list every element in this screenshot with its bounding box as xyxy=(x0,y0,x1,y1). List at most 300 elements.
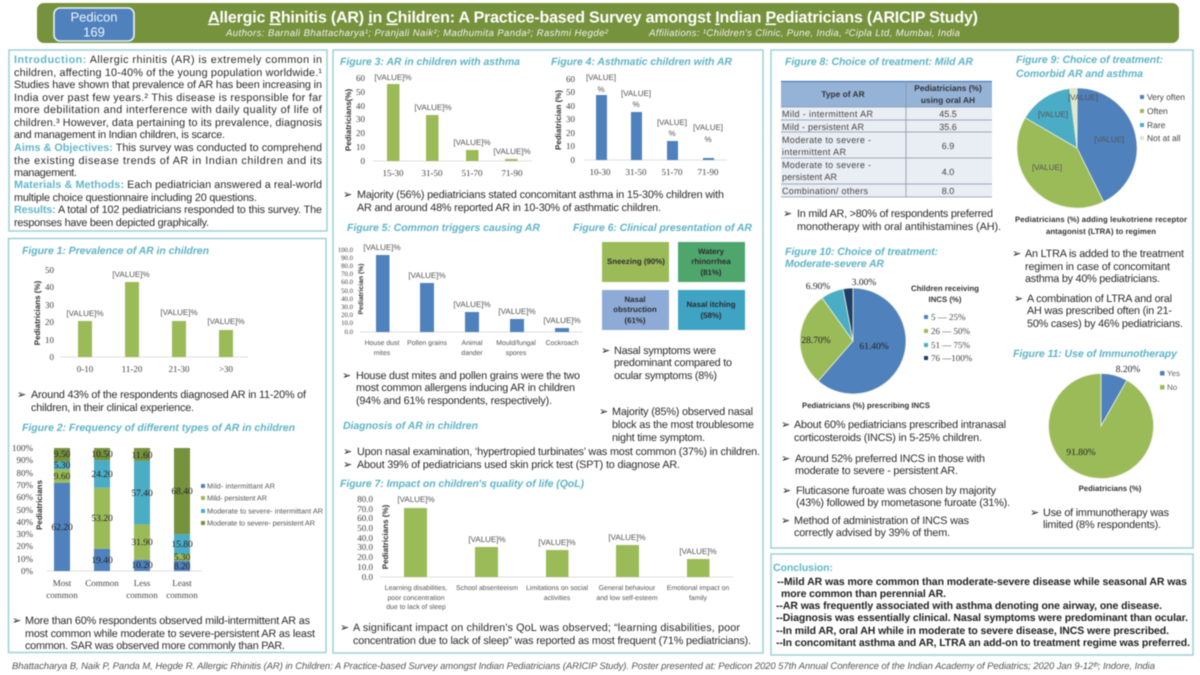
bar chart: figure 4: 31-50 xyxy=(626,167,647,177)
heading: figure 3: Figure 3: AR in children with asthma xyxy=(340,56,520,68)
takeaway: figure 9 combination: A combination of LTRA and oral xyxy=(1027,293,1172,305)
badge: Pedicon 169: Pedicon xyxy=(71,10,117,24)
stacked bar chart: figure 2: 11.60 xyxy=(131,451,153,461)
tiles: figure 6 clinical presentation: (81%) xyxy=(700,268,722,277)
bar chart: figure 7: 40.0 xyxy=(357,533,374,543)
authors: Authors: Barnali Bhattacharya¹; Pranjali Naik²; Madhumita Panda²; Rashmi Hegde² xyxy=(225,28,609,39)
stacked bar chart: figure 2: 57.40 xyxy=(131,489,153,499)
bar chart: figure 1: 0 xyxy=(50,352,54,362)
takeaway: figure 6 xyxy=(601,344,732,382)
bar chart: figure 3: 50 xyxy=(356,87,366,97)
bar chart: figure 7: 60.0 xyxy=(357,513,374,523)
bar chart: figure 7: 80.0 xyxy=(357,494,374,504)
bar chart: figure 3: [VALUE]% xyxy=(493,147,531,156)
legend: figure 9: Rare xyxy=(1147,120,1166,130)
footer citation: Bhattacharya B, Naik P, Panda M, Hegde R. Allergic Rhinitis (AR) in Children: A Practice-based Survey amongst Indian Pediatricians (ARICIP Study). Poster presented at: Pedicon 2020 57th Annual Conference of the Indian Academy of Pediatrics; 2020 Jan 9-12ᵗʰ; Indore, India xyxy=(12,661,1155,672)
takeaway: figure 5: ➢ xyxy=(342,369,351,382)
table: figure 8: Type of AR xyxy=(821,89,865,99)
table: figure 8: Combination/ others xyxy=(782,186,868,196)
bar chart: figure 5 xyxy=(338,243,583,357)
bar chart: figure 1: [VALUE]% xyxy=(112,270,150,279)
takeaways: figure 10: Around 52% preferred INCS in those with xyxy=(795,453,985,465)
caption: figure 10: Pediatricians (%) prescribing INCS xyxy=(802,401,930,410)
takeaway: figures 3 and 4: Majority (56%) pediatricians stated concomitant asthma in 15-30% children with xyxy=(357,189,724,201)
legend: figure 10: Children receiving xyxy=(911,284,979,293)
bar chart: figure 5: 80.0 xyxy=(341,263,354,270)
panel: conclusion xyxy=(771,554,1193,655)
introduction text: Aims & Objectives: This survey was conducted to comprehend xyxy=(14,142,322,154)
bar chart: figure 5: Pollen grains xyxy=(407,340,447,347)
tiles: figure 6 clinical presentation: (58%) xyxy=(700,311,722,320)
bar chart: figure 4: 40 xyxy=(566,101,576,111)
bar chart: figure 5: [VALUE]% xyxy=(453,300,491,309)
takeaway: figure 7: concentration due to lack of sleep” was reported as most frequent (71% pediatricians). xyxy=(353,635,751,647)
legend: figure 2: Moderate to severe- persistent AR xyxy=(207,518,315,528)
bar chart: figure 7: activities xyxy=(544,595,571,602)
pie chart: figure 9: [VALUE] xyxy=(1032,163,1062,172)
bar chart: figure 3: 10 xyxy=(356,142,366,152)
bar chart: figure 7: Emotional impact on xyxy=(667,585,729,592)
takeaway: figure 7: ➢ xyxy=(340,621,349,634)
bar chart: figure 4: 60 xyxy=(566,74,576,84)
bar chart: figure 4: [VALUE] xyxy=(693,123,723,132)
legend: figure 11 xyxy=(1160,369,1180,392)
introduction text: Materials & Methods: Each pediatrician answered a real-world xyxy=(14,179,322,191)
bar chart: figure 1: 40 xyxy=(45,282,54,292)
bar chart: figure 1: Pediatricians (%) xyxy=(33,280,42,345)
takeaway: night time symptom: Majority (85%) observed nasal xyxy=(612,406,753,418)
bar chart: figure 5: 10.0 xyxy=(341,320,354,327)
heading: figure 10: Moderate-severe AR xyxy=(785,258,884,270)
stacked bar chart: figure 2: 62.20 xyxy=(51,523,73,533)
takeaways: figure 10: correctly advised by 39% of them. xyxy=(794,527,950,539)
legend: figure 10: 51 — 75% xyxy=(931,340,970,350)
tiles: figure 6 clinical presentation xyxy=(602,242,745,330)
bar chart: figure 5: dander xyxy=(461,350,483,357)
takeaways: figure 10: ➢ xyxy=(781,418,790,431)
bar chart: figure 5: 60.0 xyxy=(341,279,354,286)
bar chart: figure 1: [VALUE]% xyxy=(207,317,245,326)
takeaway: figure 9 combination xyxy=(1014,292,1183,330)
bar chart: figure 3: 0 xyxy=(360,156,366,166)
takeaway: figure 2: common. SAR was observed more commonly than PAR. xyxy=(25,640,285,652)
bar chart: figure 7: [VALUE]% xyxy=(538,538,576,547)
takeaways: figure 10: ➢ xyxy=(782,484,791,497)
stacked bar chart: figure 2: 53.20 xyxy=(91,514,113,524)
stacked bar chart: figure 2: 50% xyxy=(16,505,34,515)
bar chart: figure 3: [VALUE]% xyxy=(414,103,452,112)
takeaway: figure 6: Nasal symptoms were xyxy=(614,345,716,357)
takeaway: figure 5: (94% and 61% respondents, respectively). xyxy=(356,395,552,407)
bar chart: figure 3: 51-70 xyxy=(462,168,483,178)
introduction text: management. xyxy=(14,167,77,179)
stacked bar chart: figure 2: Most xyxy=(53,578,72,588)
heading: figure 10 xyxy=(785,246,938,270)
legend: figure 9: Often xyxy=(1147,106,1168,116)
stacked bar chart: figure 2: 10.20 xyxy=(131,561,153,571)
takeaway: figure 11: limited (8% respondents). xyxy=(1043,519,1161,531)
stacked bar chart: figure 2: 70% xyxy=(16,480,34,490)
bar chart: figure 7: 70.0 xyxy=(357,504,374,514)
legend: figure 10: INCS (%) xyxy=(929,295,962,304)
takeaway: figure 8: In mild AR, >80% of respondents preferred xyxy=(797,208,993,220)
stacked bar chart: figure 2: 40% xyxy=(16,517,34,527)
bar chart: figure 5: spores xyxy=(506,350,527,357)
panel: figures 1 and 2 xyxy=(8,238,326,652)
caption: figure 9: antagonist (LTRA) to regimen xyxy=(1046,227,1156,236)
bar chart: figure 7: [VALUE]% xyxy=(608,533,646,542)
stacked bar chart: figure 2: 8.20 xyxy=(174,562,191,572)
bar chart: figure 3: 71-90 xyxy=(502,168,523,178)
heading: figure 6: Figure 6: Clinical presentation of AR xyxy=(573,222,752,234)
pie chart: figure 9: [VALUE] xyxy=(1038,110,1068,119)
bar chart: figure 3: 31-50 xyxy=(422,168,443,178)
takeaway: figure 5: most common allergens inducing AR in children xyxy=(356,382,575,394)
introduction text: and management in Indian children, is scarce. xyxy=(14,129,225,141)
takeaway: figure 8 xyxy=(783,207,1001,233)
introduction text: more debilitation and interference with daily quality of life of xyxy=(14,104,323,116)
legend: figure 2: Moderate to severe- intermittant AR xyxy=(207,506,323,516)
table: figure 8: 8.0 xyxy=(942,186,954,196)
pie chart: figure 9: [VALUE] xyxy=(1068,93,1098,102)
stacked bar chart: figure 2: Common xyxy=(85,578,119,588)
introduction text: Introduction: Allergic rhinitis (AR) is extremely common in xyxy=(14,54,322,66)
bar chart: figure 4: Pediatrician (%) xyxy=(554,90,563,150)
stacked bar chart: figure 2: 31.90 xyxy=(131,538,153,548)
conclusion points: --In mild AR, oral AH while in moderate to severe disease, INCS were prescribed. xyxy=(776,625,1169,637)
bar chart: figure 3: [VALUE]% xyxy=(374,73,412,82)
takeaway: figure 5: House dust mites and pollen grains were the two xyxy=(356,370,580,382)
bar chart: figure 5: [VALUE]% xyxy=(543,316,581,325)
introduction text: the existing disease trends of AR in Indian children and its xyxy=(14,155,323,167)
takeaway: figure 1: ➢ xyxy=(17,388,26,401)
bar chart: figure 5: 100.0 xyxy=(338,247,354,254)
stacked bar chart: figure 2: 9.60 xyxy=(54,472,71,482)
heading: figure 2: Figure 2: Frequency of different types of AR in children xyxy=(22,422,295,434)
pie chart: figure 10 xyxy=(800,278,979,410)
takeaway: diagnosis: ➢ xyxy=(343,458,352,471)
bar chart: figure 7: 10.0 xyxy=(357,562,374,572)
table: figure 8: Mild - persistent AR xyxy=(782,122,864,132)
tiles: figure 6 clinical presentation: rhinorrhea xyxy=(691,257,731,266)
bar chart: figure 7: Learning disabilities, xyxy=(385,585,447,592)
takeaway: figure 2 xyxy=(12,614,315,652)
stacked bar chart: figure 2: 68.40 xyxy=(171,487,193,497)
tiles: figure 6 clinical presentation: Nasal itching xyxy=(686,300,736,309)
bar chart: figure 1: 20 xyxy=(45,317,54,327)
table: figure 8: using oral AH xyxy=(921,95,975,105)
table: figure 8: Moderate to severe - xyxy=(782,160,871,170)
stacked bar chart: figure 2: 20% xyxy=(16,541,34,551)
legend: figure 2 xyxy=(201,482,323,528)
introduction text: children, affecting 10-40% of the young population worldwide.¹ xyxy=(14,67,322,79)
table: figure 8: Pediatricians (%) xyxy=(914,83,982,93)
panel: introduction xyxy=(9,50,327,231)
takeaways: figure 10: Fluticasone furoate was chosen by majority xyxy=(796,485,997,497)
bar chart: figure 5: 50.0 xyxy=(341,288,354,295)
legend: figure 9: Not at all xyxy=(1147,133,1181,143)
takeaway: diagnosis: About 39% of pediatricians used skin prick test (SPT) to diagnose AR. xyxy=(357,459,680,471)
pie chart: figure 11 xyxy=(1049,365,1180,493)
bar chart: figure 4: 10-30 xyxy=(590,167,611,177)
legend: figure 2: Mild- intermittant AR xyxy=(207,482,275,490)
stacked bar chart: figure 2: 90% xyxy=(16,455,34,465)
introduction text: Studies have shown that prevalence of AR has been increasing in xyxy=(14,79,322,91)
bar chart: figure 4: % xyxy=(704,135,712,144)
bar chart: figure 4: % xyxy=(597,85,605,94)
takeaway: figure 6: ocular symptoms (8%) xyxy=(614,370,717,382)
badge: Pedicon 169: 169 xyxy=(83,24,105,40)
bar chart: figure 7: [VALUE]% xyxy=(397,495,435,504)
bar chart: figure 7 xyxy=(357,494,733,611)
bar chart: figure 5: Animal xyxy=(461,340,483,347)
takeaway: figure 9 LTRA: regimen in case of concomitant xyxy=(1025,261,1170,273)
bar chart: figure 4: [VALUE] xyxy=(621,89,651,98)
heading: figure 4: Figure 4: Asthmatic children with AR xyxy=(551,56,732,68)
introduction text: children.³ However, data pertaining to its prevalence, diagnosis xyxy=(14,117,323,129)
table: figure 8: Mild - intermittent AR xyxy=(782,109,874,119)
bar chart: figure 5: 70.0 xyxy=(341,271,354,278)
heading: conclusion: Conclusion: xyxy=(773,562,833,574)
stacked bar chart: figure 2: 100% xyxy=(12,443,34,453)
table: figure 8: persistent AR xyxy=(782,172,838,182)
bar chart: figure 5: 30.0 xyxy=(341,304,354,311)
bar chart: figure 4: % xyxy=(668,129,676,138)
stacked bar chart: figure 2 xyxy=(12,443,323,600)
takeaway: figure 9 combination: ➢ xyxy=(1014,292,1023,305)
bar chart: figure 1: 0-10 xyxy=(77,364,94,374)
tiles: figure 6 clinical presentation: obstruction xyxy=(613,305,657,314)
heading: figure 9: Comorbid AR and asthma xyxy=(1016,68,1143,80)
takeaway: night time symptom xyxy=(599,405,754,444)
pie chart: figure 9: [VALUE] xyxy=(1094,135,1124,144)
stacked bar chart: figure 2: common xyxy=(46,590,78,600)
heading: figure 8: Figure 8: Choice of treatment: Mild AR xyxy=(785,56,973,68)
takeaways: figure 10: Method of administration of INCS was xyxy=(794,515,970,527)
pie chart: figure 11: 91.80% xyxy=(1066,448,1096,458)
bar chart: figure 4: 50 xyxy=(566,87,576,97)
bar chart: figure 7: Limitations on social xyxy=(526,585,588,592)
bar chart: figure 1: 50 xyxy=(45,265,54,275)
bar chart: figure 5: House dust xyxy=(365,340,400,347)
header banner xyxy=(37,3,1179,43)
bar chart: figure 1 xyxy=(33,265,248,374)
bar chart: figure 7: [VALUE]% xyxy=(679,547,717,556)
bar chart: figure 3: [VALUE]% xyxy=(453,138,491,147)
takeaway: night time symptom: night time symptom. xyxy=(612,432,705,444)
bar chart: figure 5: [VALUE]% xyxy=(498,307,536,316)
takeaways: figure 10 xyxy=(781,418,1010,539)
bar chart: figure 4: % xyxy=(632,100,640,109)
bar chart: figure 1: 11-20 xyxy=(122,364,143,374)
takeaway: figure 2: More than 60% respondents observed mild-intermittent AR as xyxy=(25,615,311,627)
takeaway: figure 9 combination: 50% cases) by 46% pediatricians. xyxy=(1027,318,1183,330)
table: figure 8: 4.0 xyxy=(942,167,954,177)
bar chart: figure 4 xyxy=(554,73,727,177)
stacked bar chart: figure 2: common xyxy=(166,590,198,600)
conclusion points: --Mild AR was more common than moderate-severe disease while seasonal AR was xyxy=(777,576,1187,588)
stacked bar chart: figure 2: Least xyxy=(172,578,192,588)
legend: figure 10: 26 — 50% xyxy=(931,326,970,336)
takeaway: figure 9 LTRA xyxy=(1012,247,1184,285)
heading: figure 11: Figure 11: Use of Immunotherapy xyxy=(1013,348,1178,360)
stacked bar chart: figure 2: 5.30 xyxy=(54,461,71,471)
bar chart: figure 7: and low self-esteem xyxy=(596,595,658,602)
bar chart: figure 7: 20.0 xyxy=(357,552,374,562)
tiles: figure 6 clinical presentation: Sneezing (90%) xyxy=(607,257,665,266)
stacked bar chart: figure 2: 15.80 xyxy=(171,540,193,550)
legend: figure 9 xyxy=(1140,92,1185,143)
takeaway: figure 1: Around 43% of the respondents diagnosed AR in 11-20% of xyxy=(31,389,307,401)
stacked bar chart: figure 2: 24.20 xyxy=(91,470,113,480)
table: figure 8 xyxy=(781,81,992,197)
bar chart: figure 7: poor concentration xyxy=(387,595,445,602)
bar chart: figure 3: Pediatricians(%) xyxy=(344,89,353,151)
conclusion points: more common than perennial AR. xyxy=(781,588,946,600)
takeaway: figure 11: Use of immunotherapy was xyxy=(1043,507,1170,519)
tiles: figure 6 clinical presentation: Nasal xyxy=(624,295,646,304)
takeaway: figure 8: monotherapy with oral antihistamines (AH). xyxy=(797,221,1001,233)
introduction text: India over past few years.² This disease is responsible for far xyxy=(14,92,322,104)
takeaway: figures 3 and 4: ➢ xyxy=(343,188,352,201)
takeaway: diagnosis: Upon nasal examination, ‘hypertropied turbinates’ was most common (37%) in children. xyxy=(357,446,760,458)
stacked bar chart: figure 2: 10.50 xyxy=(91,450,113,460)
bar chart: figure 5: 0.0 xyxy=(344,329,354,336)
takeaway: figure 8: ➢ xyxy=(783,207,792,220)
bar chart: figure 7: 50.0 xyxy=(357,523,374,533)
caption: figure 9: Pediatricians (%) adding leukotriene receptor xyxy=(1015,215,1187,224)
heading: figure 9: Figure 9: Choice of treatment: xyxy=(1016,54,1163,66)
takeaway: figures 3 and 4: AR and around 48% reported AR in 10-30% of asthmatic children. xyxy=(357,202,661,214)
panel: figures 3 to 7 xyxy=(333,50,763,653)
stacked bar chart: figure 2: common xyxy=(126,590,158,600)
bar chart: figure 4: 30 xyxy=(566,114,576,124)
bar chart: figure 7: Pediatricians (%) xyxy=(381,504,390,569)
bar chart: figure 5: Cockroach xyxy=(546,340,579,347)
takeaway: figure 9 LTRA: asthma by 40% pediatricians. xyxy=(1025,273,1160,285)
takeaway: figure 2: ➢ xyxy=(12,614,21,627)
takeaway: figure 9 LTRA: An LTRA is added to the treatment xyxy=(1025,248,1184,260)
legend: figure 10 xyxy=(911,284,979,363)
bar chart: figure 3: 15-30 xyxy=(382,168,404,178)
legend: figure 9: Very often xyxy=(1147,92,1185,102)
takeaway: figure 11: ➢ xyxy=(1030,506,1039,519)
heading: diagnosis: Diagnosis of AR in children xyxy=(343,420,478,432)
takeaway: diagnosis: ➢ xyxy=(343,445,352,458)
takeaway: figure 6: ➢ xyxy=(601,344,610,357)
stacked bar chart: figure 2: Pediatricians xyxy=(35,480,44,530)
conclusion points: --In concomitant asthma and AR, LTRA an add-on to treatment regime was preferred. xyxy=(776,637,1190,649)
bar chart: figure 5: Mould/fungal xyxy=(496,340,536,347)
stacked bar chart: figure 2: 5.30 xyxy=(174,553,191,563)
introduction text: responses have been depicted graphically. xyxy=(14,217,209,229)
stacked bar chart: figure 2: 9.50 xyxy=(54,450,71,460)
bar chart: figure 1: [VALUE]% xyxy=(160,308,198,317)
panel: figures 8 to 11 xyxy=(771,50,1193,548)
takeaway: figure 1 xyxy=(17,388,307,414)
title: Allergic Rhinitis (AR) in Children: A Practice-based Survey amongst Indian Pediatricians (ARICIP Study) xyxy=(208,10,978,26)
takeaway: figure 9 LTRA: ➢ xyxy=(1012,247,1021,260)
bar chart: figure 4: 10 xyxy=(566,141,576,151)
takeaway: figure 9 combination: AH was prescribed often (in 21- xyxy=(1027,305,1172,317)
stacked bar chart: figure 2: 60% xyxy=(16,492,34,502)
bar chart: figure 7: family xyxy=(689,595,708,602)
bar chart: figure 1: 21-30 xyxy=(168,364,190,374)
takeaway: night time symptom: ➢ xyxy=(599,405,608,418)
table: figure 8: 35.6 xyxy=(939,122,957,132)
bar chart: figure 7: General behaviour xyxy=(599,585,656,592)
takeaway: figure 11 xyxy=(1030,506,1170,531)
bar chart: figure 3: 20 xyxy=(356,128,366,138)
pie chart: figure 9 xyxy=(1015,88,1187,236)
bar chart: figure 3: 30 xyxy=(356,114,366,124)
bar chart: figure 4: [VALUE] xyxy=(586,73,616,82)
affiliations: Affiliations: ¹Children's Clinic, Pune, India, ²Cipla Ltd, Mumbai, India xyxy=(648,28,960,39)
stacked bar chart: figure 2: 80% xyxy=(16,468,34,478)
bar chart: figure 4: 20 xyxy=(566,128,576,138)
bar chart: figure 5: Pediatrician (%) xyxy=(358,264,365,314)
conclusion points: --AR was frequently associated with asthma denoting one airway, one disease. xyxy=(776,600,1162,612)
bar chart: figure 1: 30 xyxy=(45,300,54,310)
tiles: figure 6 clinical presentation: Watery xyxy=(698,247,725,256)
pie chart: figure 10: 28.70% xyxy=(801,336,831,346)
stacked bar chart: figure 2: 10% xyxy=(16,554,34,564)
pie chart: figure 11: 8.20% xyxy=(1116,365,1140,375)
table: figure 8: 45.5 xyxy=(939,109,957,119)
takeaway: figure 7 xyxy=(340,621,751,647)
stacked bar chart: figure 2: Less xyxy=(134,578,151,588)
bar chart: figure 1: 10 xyxy=(45,335,54,345)
bar chart: figure 7: School absenteeism xyxy=(456,585,518,592)
introduction text xyxy=(14,54,323,229)
takeaways: figure 10: moderate to severe - persistent AR. xyxy=(795,465,958,477)
bar chart: figure 7: 30.0 xyxy=(357,542,374,552)
bar chart: figure 1: [VALUE]% xyxy=(66,309,104,318)
pie chart: figure 10: 6.90% xyxy=(806,282,830,292)
heading: figure 9 xyxy=(1016,54,1163,80)
takeaway: figure 6: predominant compared to xyxy=(614,357,732,369)
stacked bar chart: figure 2: 19.40 xyxy=(91,556,113,566)
takeaway: night time symptom: block as the most troublesome xyxy=(612,419,754,431)
bar chart: figure 5: mites xyxy=(374,350,391,357)
bar chart: figure 5: [VALUE]% xyxy=(363,243,401,252)
bar chart: figure 4: 71-90 xyxy=(698,167,719,177)
heading: figure 5: Figure 5: Common triggers causing AR xyxy=(347,222,540,234)
takeaways: figure 10: ➢ xyxy=(781,514,790,527)
bar chart: figure 5: 40.0 xyxy=(341,296,354,303)
takeaways: figure 10: (43%) followed by mometasone furoate (31%). xyxy=(796,497,1010,509)
takeaway: figure 7: A significant impact on children's QoL was observed; “learning disabilities, poor xyxy=(353,622,740,634)
takeaway: figure 5 xyxy=(342,369,580,407)
badge: Pedicon 169 xyxy=(54,8,134,41)
pie chart: figure 10: 61.40% xyxy=(859,342,889,352)
bar chart: figure 3: 60 xyxy=(356,73,366,83)
bar chart: figure 7: due to lack of sleep xyxy=(386,604,446,611)
bar chart: figure 1: >30 xyxy=(219,364,234,374)
legend: figure 11: No xyxy=(1167,383,1178,392)
tiles: figure 6 clinical presentation: (61%) xyxy=(624,316,646,325)
legend: figure 11: Yes xyxy=(1167,369,1180,378)
bar chart: figure 3 xyxy=(344,73,532,178)
bar chart: figure 7: [VALUE]% xyxy=(468,535,506,544)
bar chart: figure 7: 0.0 xyxy=(362,572,374,582)
conclusion points xyxy=(776,576,1190,649)
takeaway: figures 3 and 4 xyxy=(343,188,724,214)
takeaway: figure 2: most common while moderate to severe-persistent AR as least xyxy=(25,628,315,640)
legend: figure 2: Mild- persistent AR xyxy=(207,494,267,502)
introduction text: Results: A total of 102 pediatricians responded to this survey. The xyxy=(14,204,322,216)
bar chart: figure 4: 51-70 xyxy=(662,167,683,177)
